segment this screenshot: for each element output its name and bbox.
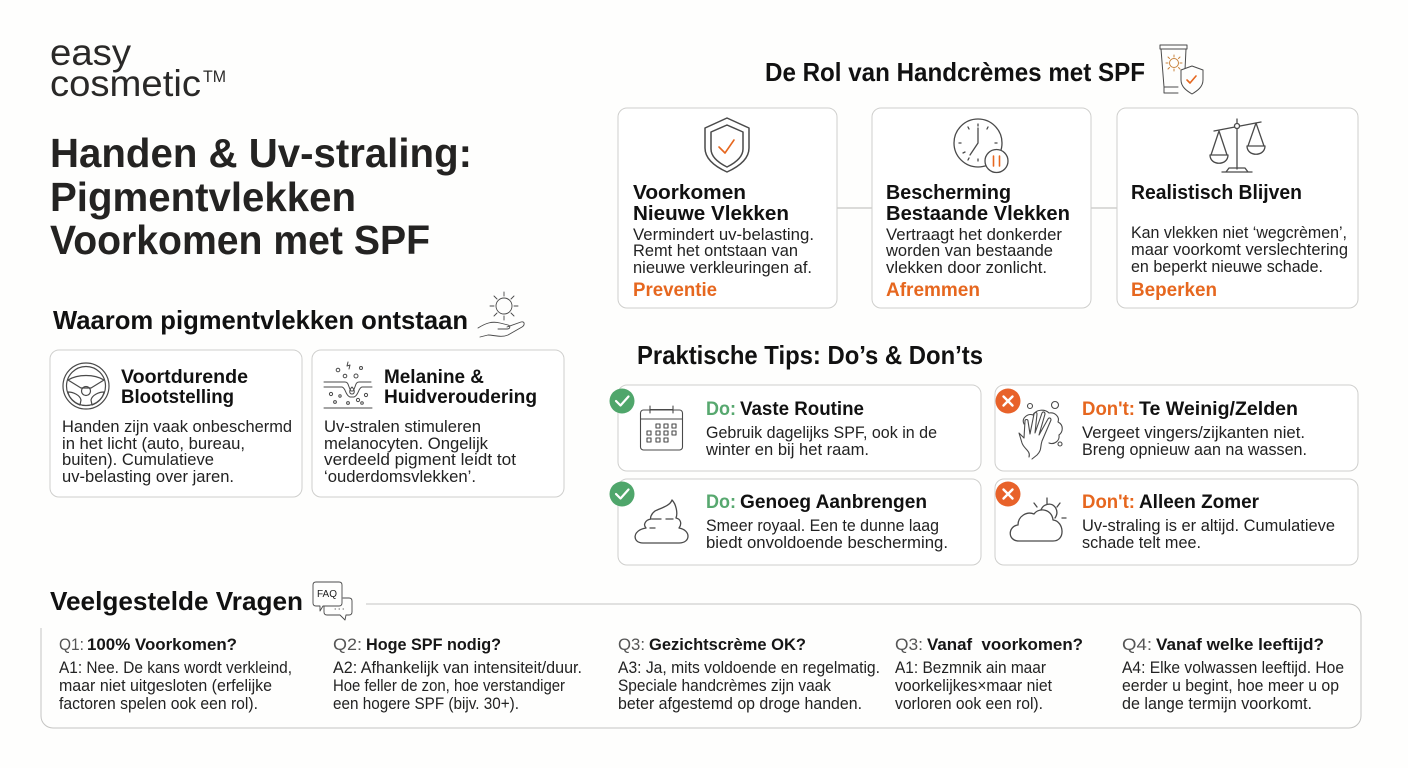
faq item 3: Gezichtscrème OK? — [649, 636, 806, 654]
panel: voorkomen nieuwe vlekken: Nieuwe Vlekken — [633, 203, 789, 225]
faq item 1 — [59, 636, 292, 713]
faq item 3 — [618, 636, 880, 713]
faq item 2: een hogere SPF (bijv. 30+). — [333, 695, 519, 713]
logo: easy — [50, 32, 132, 73]
panel: dont alleen zomer: Uv-straling is er altijd. Cumulatieve — [1082, 517, 1335, 535]
panel: melanine en huidveroudering: Huidveroudering — [384, 387, 537, 408]
panel: voortdurende blootstelling: buiten). Cumulatieve — [62, 451, 214, 469]
icon: cream dollop — [635, 500, 688, 543]
panel: realistisch blijven — [1117, 108, 1358, 308]
heading: waarom pigmentvlekken ontstaan: Waarom pigmentvlekken ontstaan — [53, 305, 468, 335]
panel: dont alleen zomer: Alleen Zomer — [1139, 492, 1260, 513]
panel: bescherming bestaande vlekken: worden van bestaande — [885, 242, 1053, 260]
faq item 5: Q4: — [1122, 636, 1152, 654]
panel: do genoeg aanbrengen — [618, 479, 981, 565]
icon: orange cross — [996, 482, 1020, 506]
icon: sun over hand — [478, 292, 524, 337]
panel: voortdurende blootstelling: Blootstelling — [121, 387, 234, 408]
panel: voorkomen nieuwe vlekken: Remt het ontstaan van — [633, 242, 798, 260]
panel: do vaste routine: winter en bij het raam. — [705, 441, 869, 459]
faq item 2: A2: Afhankelijk van intensiteit/duur. — [333, 659, 582, 677]
icon: orange cross — [996, 388, 1020, 414]
icon: green check — [610, 482, 634, 506]
title: Pigmentvlekken — [50, 174, 356, 220]
title: Voorkomen met SPF — [50, 217, 430, 263]
panel: melanine en huidveroudering — [312, 350, 564, 497]
icon: shield — [705, 118, 749, 172]
panel: bescherming bestaande vlekken: vlekken door zonlicht. — [886, 259, 1047, 277]
panel: voortdurende blootstelling: Handen zijn vaak onbeschermd — [62, 418, 292, 436]
faq item 4: Vanaf voorkomen? — [927, 636, 1083, 654]
panel: voorkomen nieuwe vlekken: Preventie — [633, 280, 717, 301]
faq item 3: A3: Ja, mits voldoende en regelmatig. — [618, 659, 880, 677]
faq item 2: Hoe feller de zon, hoe verstandiger — [333, 677, 565, 695]
panel: bescherming bestaande vlekken: Vertraagt het donkerder — [886, 226, 1063, 244]
panel: do genoeg aanbrengen: Do: — [706, 492, 736, 513]
panel: melanine en huidveroudering: melanocyten. Ongelijk — [324, 435, 489, 453]
panel: do genoeg aanbrengen: Smeer royaal. Een te dunne laag — [706, 517, 939, 535]
faq item 1: 100% Voorkomen? — [87, 636, 237, 654]
faq item 1: factoren spelen ook een rol). — [59, 695, 258, 713]
icon: calendar — [640, 406, 682, 450]
panel: dont te weinig: Breng opnieuw aan na wassen. — [1082, 441, 1307, 459]
panel: dont alleen zomer — [995, 479, 1358, 565]
panel: voorkomen nieuwe vlekken: Voorkomen — [633, 182, 746, 204]
icon: faq bubbles — [313, 582, 352, 620]
icon: steering wheel — [63, 363, 109, 409]
panel: realistisch blijven: Beperken — [1131, 280, 1217, 301]
faq item 3: beter afgestemd op droge handen. — [618, 695, 862, 713]
icon: clock with pause — [954, 119, 1008, 172]
icon: green check — [610, 388, 634, 414]
faq item 5: Vanaf welke leeftijd? — [1156, 636, 1324, 654]
panel: dont te weinig — [995, 385, 1358, 471]
panel: voorkomen nieuwe vlekken: Vermindert uv-belasting. — [633, 226, 814, 244]
icon: scales — [1210, 119, 1265, 172]
panel: bescherming bestaande vlekken: Afremmen — [886, 280, 980, 301]
faq item 5: eerder u begint, hoe meer u op — [1122, 677, 1339, 695]
connectors between role cards — [837, 207, 1117, 209]
title: Handen & Uv-straling: — [50, 130, 472, 176]
panel: dont te weinig: Te Weinig/Zelden — [1139, 399, 1298, 420]
icon: faq bubbles: FAQ — [317, 589, 337, 600]
icon: washing hand — [1019, 402, 1062, 459]
faq item 4: vorloren ook een rol). — [895, 695, 1043, 713]
panel: faq — [41, 604, 1361, 728]
panel: melanine en huidveroudering: verdeeld pigment leidt tot — [324, 451, 516, 469]
faq item 5: A4: Elke volwassen leeftijd. Hoe — [1122, 659, 1344, 677]
faq item 3: Q3: — [618, 636, 645, 654]
panel: do vaste routine: Vaste Routine — [740, 399, 864, 420]
panel: voortdurende blootstelling: Voortdurende — [121, 367, 248, 388]
faq item 4 — [895, 636, 1083, 713]
faq item 5: de lange termijn voorkomt. — [1122, 695, 1312, 713]
panel: do vaste routine — [618, 385, 981, 471]
panel: voorkomen nieuwe vlekken: nieuwe verkleuringen af. — [633, 259, 812, 277]
logo — [50, 32, 226, 104]
title — [50, 130, 472, 263]
icon: skin layers — [324, 362, 372, 408]
heading: praktische tips: Praktische Tips: Do’s & Don’ts — [637, 340, 983, 370]
panel: bescherming bestaande vlekken: Bestaande Vlekken — [886, 203, 1070, 225]
panel: dont te weinig: Don't: — [1082, 399, 1135, 420]
heading: veelgestelde vragen: Veelgestelde Vragen — [50, 586, 303, 616]
panel: voortdurende blootstelling: uv-belasting over jaren. — [62, 468, 234, 486]
panel: do vaste routine: Gebruik dagelijks SPF, ook in de — [706, 424, 937, 442]
panel: bescherming bestaande vlekken — [872, 108, 1091, 308]
panel: realistisch blijven: Realistisch Blijven — [1131, 182, 1302, 204]
panel: bescherming bestaande vlekken: Bescherming — [886, 182, 1011, 204]
panel: do genoeg aanbrengen: Genoeg Aanbrengen — [740, 492, 927, 513]
faq item 2: Hoge SPF nodig? — [366, 636, 501, 654]
panel: do genoeg aanbrengen: biedt onvoldoende bescherming. — [706, 534, 948, 552]
panel: dont alleen zomer: schade telt mee. — [1082, 534, 1201, 552]
logo: TM — [203, 67, 226, 86]
panel: realistisch blijven: Kan vlekken niet ‘wegcrèmen’, — [1131, 224, 1347, 242]
faq item 2 — [333, 636, 582, 713]
panel: voortdurende blootstelling — [50, 350, 302, 497]
faq item 4: voorkelijkes×maar niet — [895, 677, 1052, 695]
icon: cloud and sun — [1010, 498, 1066, 541]
panel: melanine en huidveroudering: Melanine & — [384, 367, 484, 388]
faq item 1: A1: Nee. De kans wordt verkleind, — [59, 659, 292, 677]
logo: cosmetic — [50, 63, 201, 104]
panel: do vaste routine: Do: — [706, 399, 736, 420]
panel: realistisch blijven: en beperkt nieuwe schade. — [1131, 258, 1323, 276]
faq item 1: maar niet uitgesloten (erfelijke — [59, 677, 272, 695]
panel: voorkomen nieuwe vlekken — [618, 108, 837, 308]
panel: voortdurende blootstelling: in het licht (auto, bureau, — [62, 435, 245, 453]
panel: realistisch blijven: maar voorkomt verslechtering — [1131, 241, 1348, 259]
heading: de rol van handcrèmes: De Rol van Handcrèmes met SPF — [765, 57, 1145, 87]
faq item 4: A1: Bezmnik ain maar — [895, 659, 1046, 677]
panel: melanine en huidveroudering: ‘ouderdomsvlekken’. — [324, 468, 476, 486]
icon: tube and shield — [1160, 45, 1203, 94]
faq item 2: Q2: — [333, 636, 362, 654]
faq item 1: Q1: — [59, 636, 84, 654]
panel: melanine en huidveroudering: Uv-stralen stimuleren — [324, 418, 481, 436]
faq item 5 — [1122, 636, 1344, 713]
faq item 4: Q3: — [895, 636, 923, 654]
panel: dont alleen zomer: Don't: — [1082, 492, 1135, 513]
panel: dont te weinig: Vergeet vingers/zijkanten niet. — [1082, 424, 1305, 442]
faq item 3: Speciale handcrèmes zijn vaak — [618, 677, 832, 695]
